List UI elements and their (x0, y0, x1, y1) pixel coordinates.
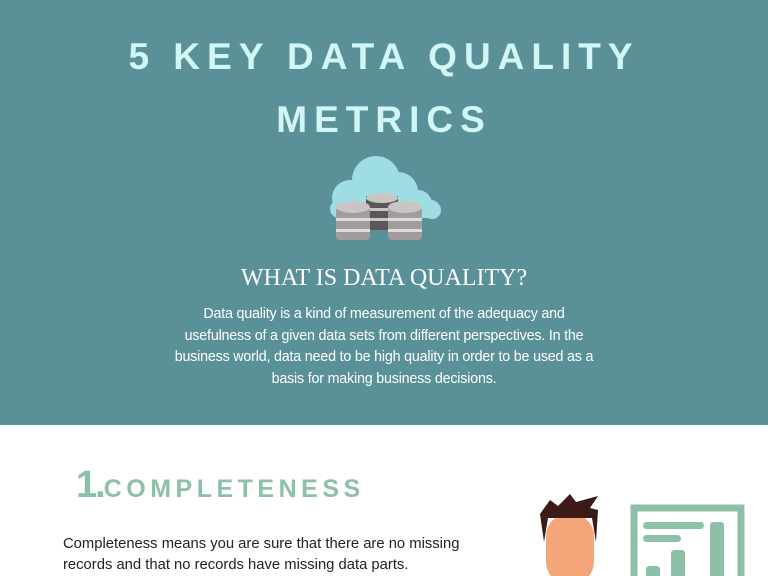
completeness text: Completeness means you are sure that there are no missing (63, 536, 459, 552)
title (128, 36, 640, 140)
intro paragraph (175, 306, 594, 386)
completeness text (63, 536, 459, 573)
intro paragraph: usefulness of a given data sets from different perspectives. In the (185, 328, 583, 344)
icon: person (540, 494, 598, 576)
title: 5 KEY DATA QUALITY (128, 36, 640, 77)
intro paragraph: business world, data need to be high quality in order to be used as a (175, 349, 593, 365)
subheading: WHAT IS DATA QUALITY? (241, 265, 527, 291)
section heading: completeness: 1.COMPLETENESS (76, 464, 365, 506)
icon: cloud database (330, 156, 441, 240)
header panel (0, 0, 768, 425)
intro paragraph: basis for making business decisions. (272, 370, 496, 386)
icon: chart board (630, 504, 744, 576)
completeness text: records and that no records have missing data parts. (63, 557, 408, 573)
title: METRICS (276, 99, 492, 140)
intro paragraph: Data quality is a kind of measurement of the adequacy and (203, 306, 565, 322)
